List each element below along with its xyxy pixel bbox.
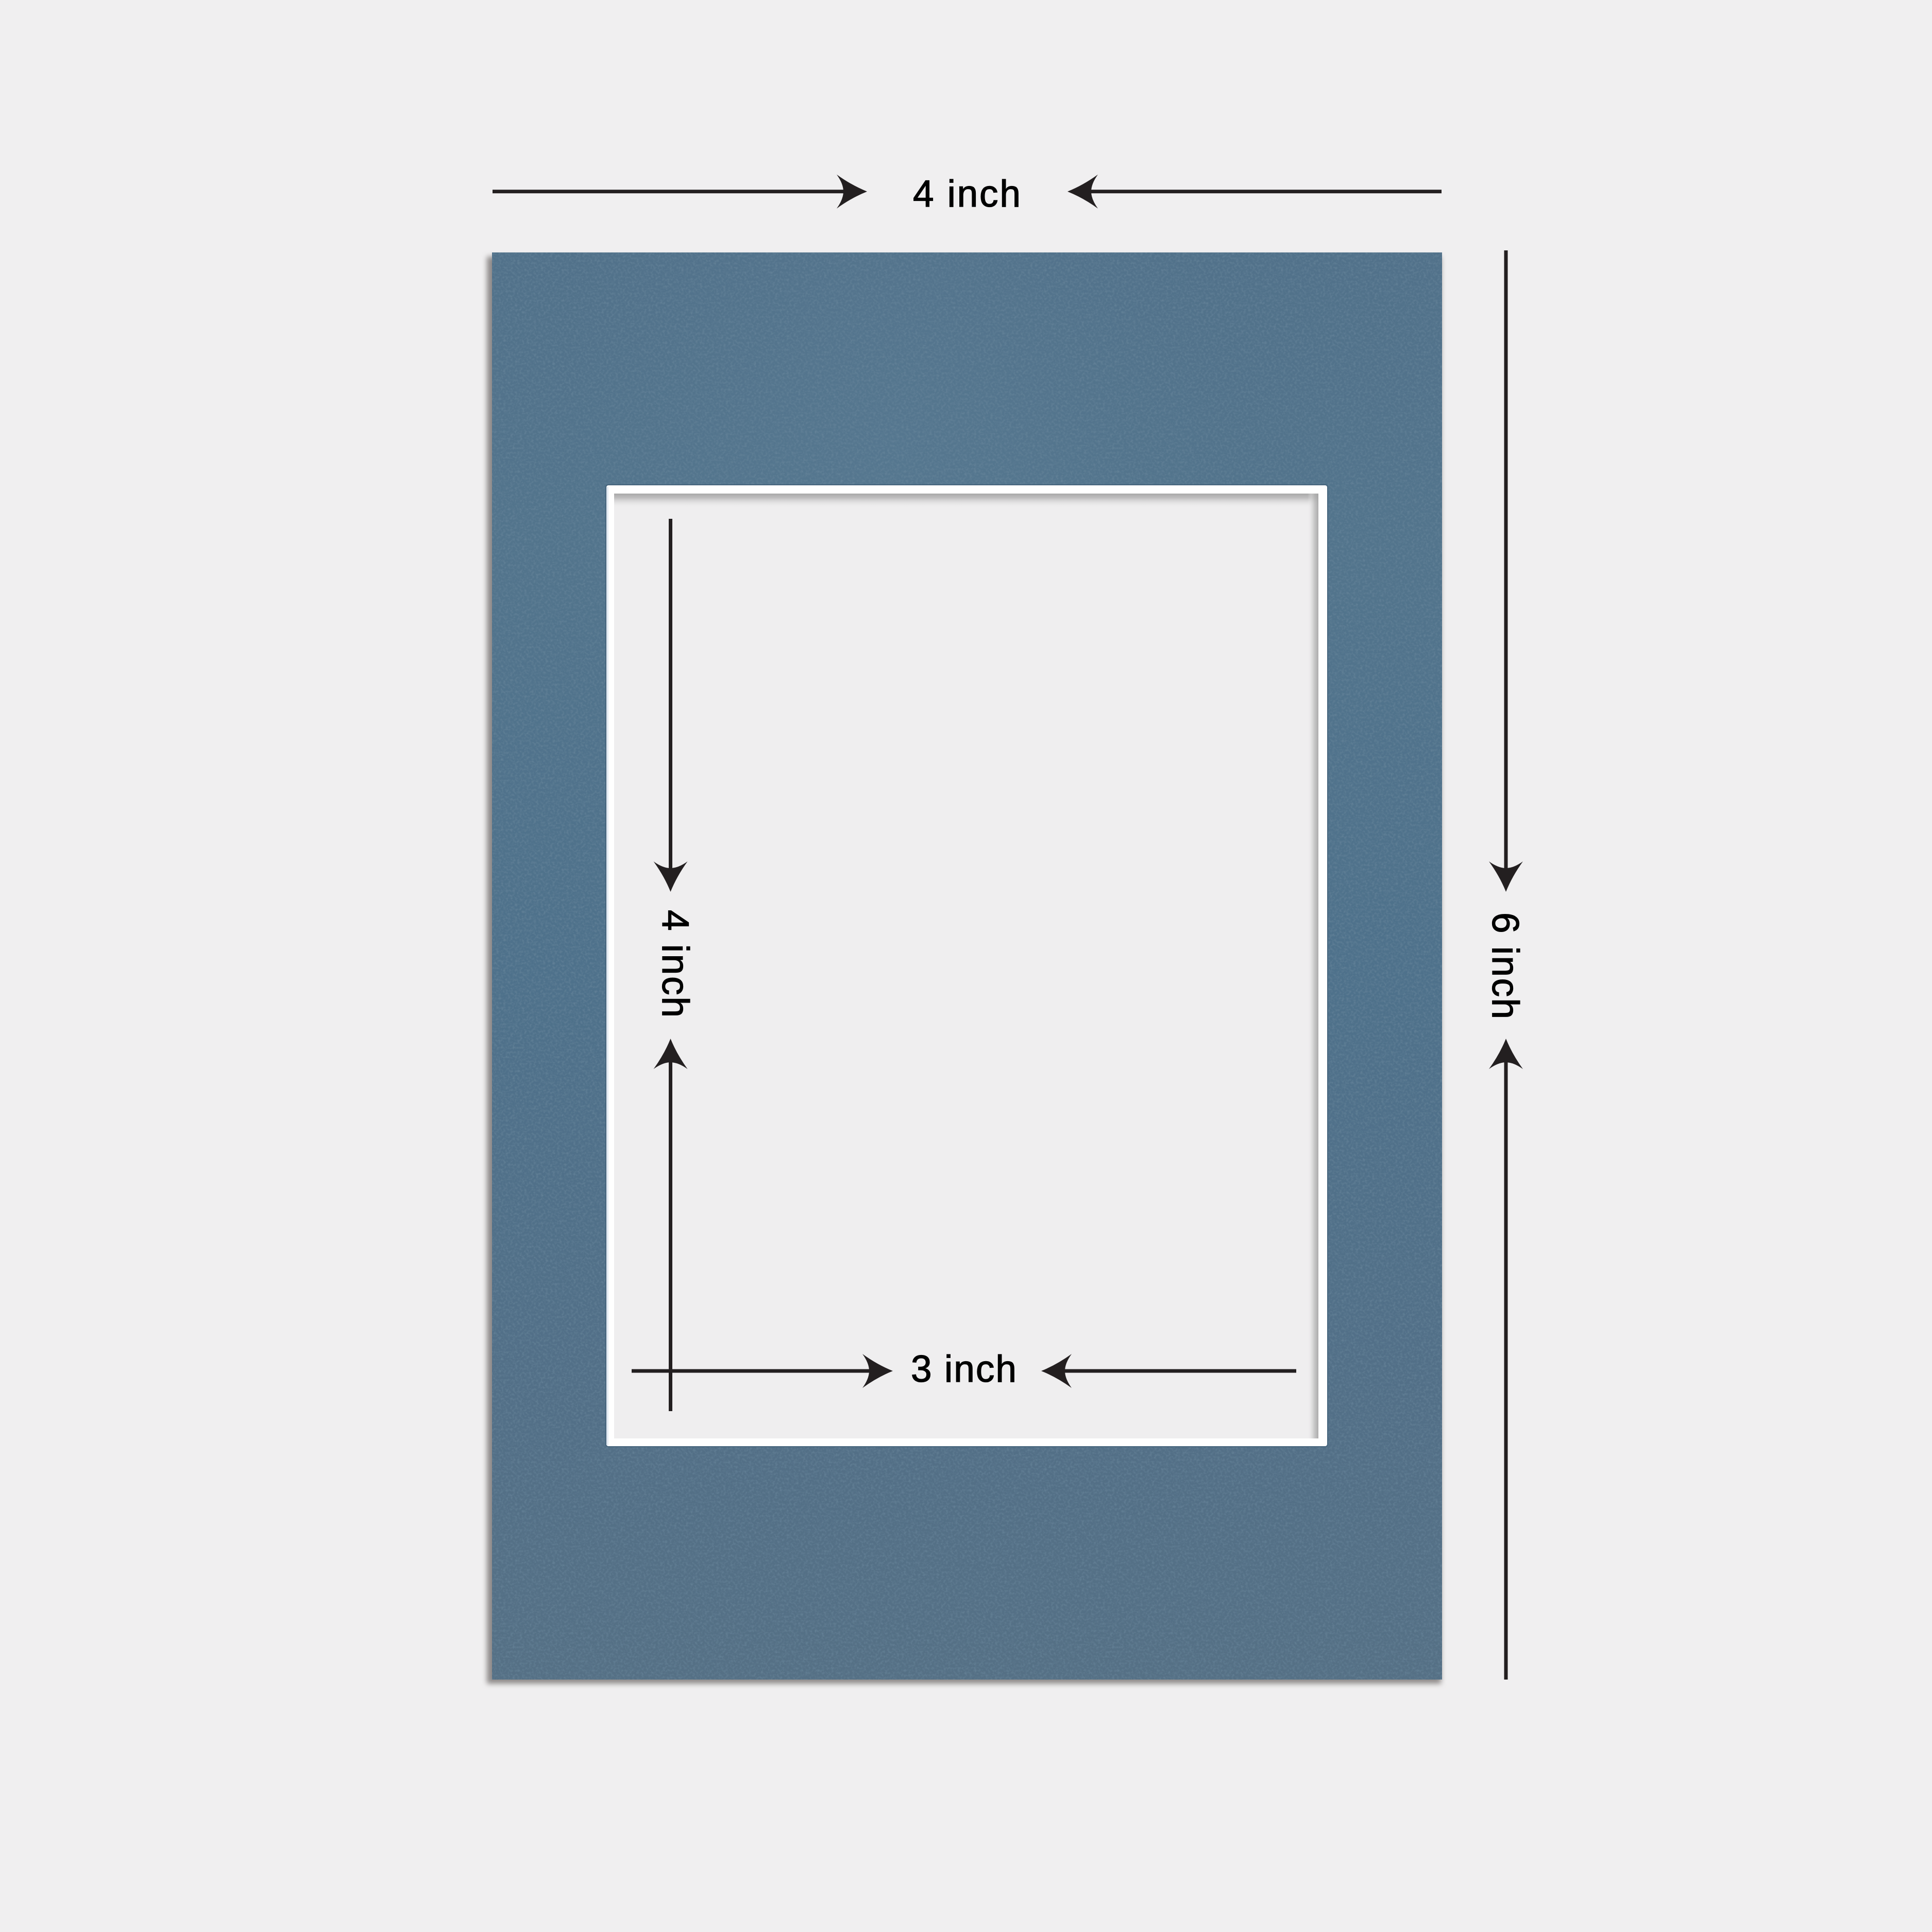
mat surface [492, 252, 1442, 1680]
arrowhead up-pointing [1489, 1039, 1523, 1069]
top inner shadow [614, 494, 1318, 508]
panel: blue mat board [487, 252, 1442, 1684]
arrowhead right-pointing [837, 175, 867, 209]
white bevel frame [606, 485, 1327, 1446]
line left [632, 1369, 871, 1372]
arrowhead up-pointing [653, 1039, 687, 1069]
line top [669, 519, 672, 869]
label: 4 inch [654, 910, 696, 1018]
arrowhead down-pointing [1489, 861, 1523, 892]
window interior [614, 494, 1318, 1438]
dimension: inner width 3 inch [632, 1348, 1296, 1390]
bevel left highlight [606, 487, 608, 1445]
line left [493, 190, 845, 193]
arrowhead right-pointing [862, 1354, 893, 1388]
arrowhead left-pointing [1041, 1354, 1072, 1388]
line right [1064, 1369, 1296, 1372]
arrowhead left-pointing [1067, 175, 1098, 209]
mat paper texture [492, 252, 1442, 1680]
mat drop shadow [487, 257, 1441, 1684]
label: 4 inch [913, 173, 1021, 215]
label: 3 inch [911, 1348, 1016, 1390]
line bottom [669, 1061, 672, 1411]
line top [1504, 250, 1507, 869]
dimension: inner height 4 inch [653, 519, 696, 1411]
bevel edge outline [605, 484, 1328, 1447]
line right [1090, 190, 1442, 193]
arrowhead down-pointing [653, 861, 687, 892]
right inner shadow [1308, 494, 1318, 1438]
label: 6 inch [1484, 912, 1526, 1019]
panel: window opening [605, 484, 1328, 1447]
dimension: top width 4 inch [493, 173, 1442, 215]
mat light variation [492, 252, 1442, 1680]
line bottom [1504, 1061, 1507, 1680]
dimension: right height 6 inch [1484, 250, 1526, 1680]
